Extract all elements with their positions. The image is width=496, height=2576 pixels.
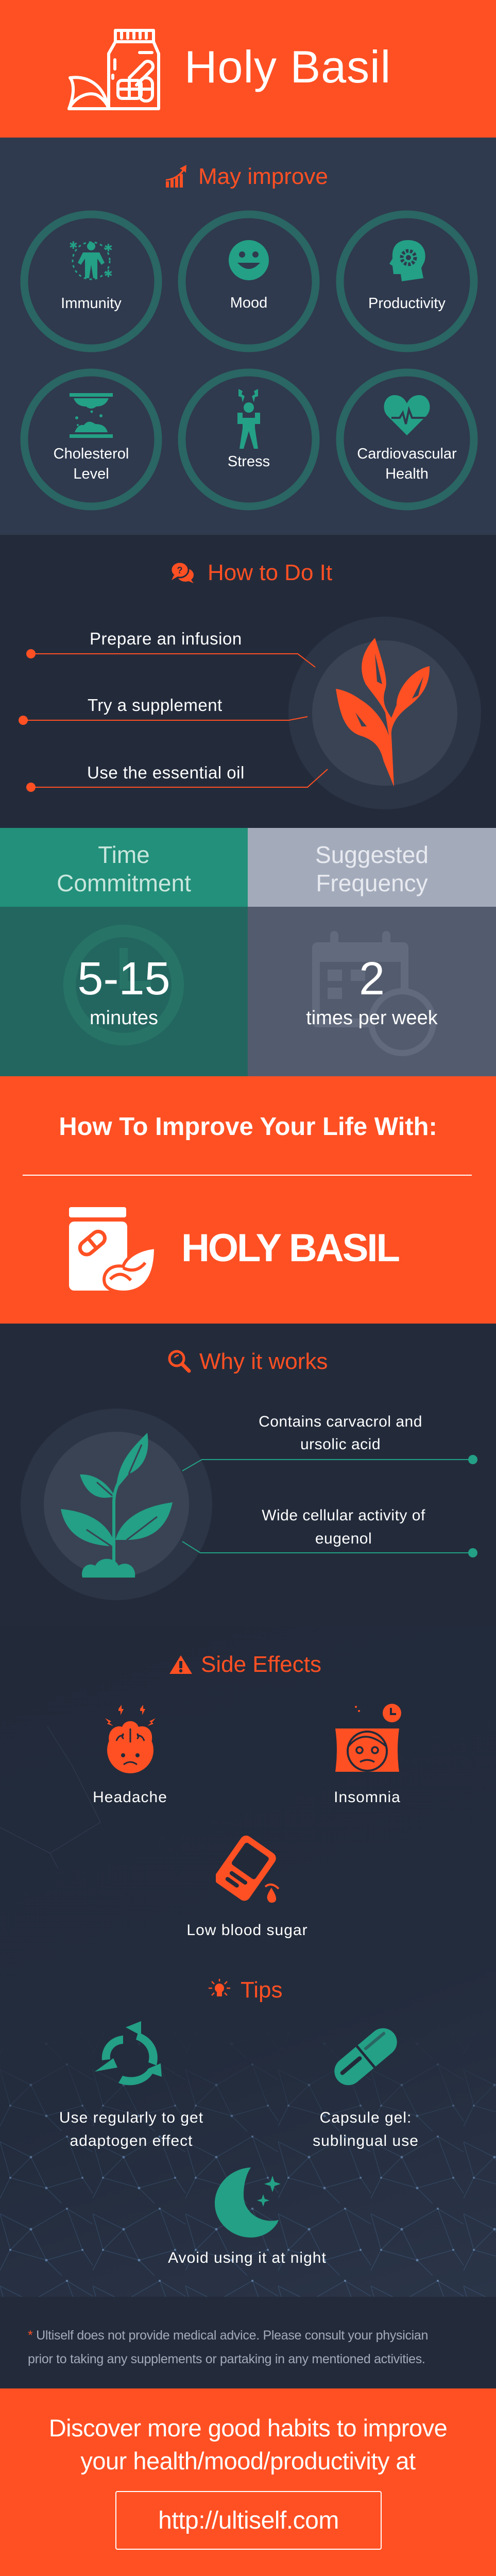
disclaimer text (28, 2328, 428, 2366)
disclaimer text: prior to taking any supplements or partaking in any mentioned activities. (28, 2352, 425, 2366)
text: eugenol (262, 1507, 425, 1547)
panel: suggested frequency (248, 828, 496, 1076)
title: Holy Basil (184, 41, 391, 92)
panel: how to improve banner (0, 1076, 496, 1324)
panel: disclaimer (0, 2297, 496, 2388)
disclaimer text: * Ultiself does not provide medical advice. Please consult your physician (28, 2328, 428, 2343)
icon: supplement jar with leaf (69, 1207, 156, 1291)
item: cardiovascular (336, 369, 478, 510)
panel: may improve (0, 138, 496, 535)
text: use the essential oil: Use the essential oil (87, 763, 245, 782)
tip: capsule gel: sublingual use (313, 2132, 419, 2149)
side effect: low blood sugar: Low blood sugar (186, 1922, 308, 1939)
side effect: headache: Headache (93, 1789, 167, 1806)
icon: growth chart (166, 165, 186, 188)
icon: magnifier (168, 1350, 191, 1372)
heading: side effects: Side Effects (201, 1652, 321, 1677)
icon: warning (169, 1655, 192, 1674)
item: cardiovascular: Health (385, 466, 429, 482)
item: stress: Stress (228, 453, 270, 470)
url box (115, 2491, 382, 2550)
heading: how to do it: How to Do It (208, 560, 332, 585)
text: eugenol: Wide cellular activity of (262, 1507, 425, 1524)
background network pattern (0, 1726, 496, 2297)
icon: question bubbles: ? (177, 565, 182, 575)
heading text: Time (98, 841, 150, 868)
url box: http://ultiself.com (158, 2507, 339, 2534)
icon: lightbulb (209, 1979, 230, 1996)
item: cholesterol: Level (73, 466, 109, 482)
icon: calendar (312, 931, 436, 1056)
tip: capsule gel: Capsule gel: (320, 2109, 412, 2126)
side effect: headache (93, 1705, 167, 1806)
item: immunity: ✱ (104, 243, 113, 254)
item: cardiovascular: Cardiovascular (357, 446, 457, 462)
text: carvacrol: Contains carvacrol and (259, 1413, 422, 1430)
heading: may improve: May improve (198, 164, 328, 189)
tip: avoid at night (168, 2167, 327, 2266)
item: cholesterol: Cholesterol (54, 446, 129, 462)
item: mood (178, 210, 319, 352)
heading: why it works: Why it works (199, 1349, 328, 1374)
heading text (315, 841, 429, 896)
value: 2 (359, 953, 385, 1005)
icon: jar with pills and leaf (67, 29, 160, 110)
icon: question bubbles (172, 563, 194, 583)
panel: time commitment: minutes (90, 1007, 158, 1029)
icon: clock (63, 925, 184, 1045)
panel: how to do it (0, 535, 496, 828)
item: immunity (21, 210, 162, 352)
chart: plant circle with connector lines (19, 617, 481, 809)
item: immunity: ✱ (69, 240, 78, 251)
tip: use regularly (59, 2021, 203, 2149)
value: 5-15 (77, 953, 170, 1005)
call to action text: Discover more good habits to improve (49, 2414, 447, 2442)
header (248, 828, 496, 907)
panel: time commitment (0, 828, 248, 1076)
item: stress (178, 369, 319, 510)
item: mood: Mood (230, 295, 267, 311)
call to action text: your health/mood/productivity at (80, 2447, 416, 2475)
item: immunity: ✱ (104, 268, 113, 280)
item: productivity: Productivity (368, 295, 446, 312)
side effect: insomnia (334, 1704, 401, 1806)
side effect: insomnia: Insomnia (334, 1789, 401, 1806)
heading text (57, 841, 191, 896)
item: cholesterol (21, 369, 162, 510)
item: immunity: Immunity (61, 295, 122, 312)
text: carvacrol: ursolic acid (300, 1436, 381, 1453)
heading text: Commitment (57, 870, 191, 896)
text: eugenol: eugenol (315, 1530, 372, 1547)
tip: use regularly: Use regularly to get (59, 2109, 203, 2126)
product name: HOLY BASIL (181, 1226, 399, 1270)
panel: discover more (0, 2388, 496, 2576)
tip: capsule gel (313, 2028, 419, 2149)
tip: avoid at night: Avoid using it at night (168, 2249, 327, 2266)
call to action text (49, 2414, 447, 2475)
panel: header (0, 0, 496, 138)
panel: why it works (0, 1324, 496, 1626)
heading: tips (209, 1977, 282, 2003)
heading: How To Improve Your Life With: (59, 1113, 437, 1141)
item: productivity (336, 210, 478, 352)
side effect: low blood sugar (186, 1835, 308, 1939)
text: try a supplement: Try a supplement (88, 696, 223, 715)
text: prepare an infusion: Prepare an infusion (90, 629, 242, 648)
heading text: Suggested (315, 841, 429, 868)
panel: side effects and tips (0, 1626, 496, 2297)
chart: plant circle with connectors (21, 1409, 477, 1600)
header (0, 828, 248, 907)
text: carvacrol (259, 1413, 422, 1453)
heading text: Frequency (316, 870, 428, 896)
heading: tips: Tips (241, 1977, 282, 2003)
tip: use regularly: adaptogen effect (70, 2132, 193, 2149)
panel: suggested frequency: times per week (306, 1007, 438, 1029)
